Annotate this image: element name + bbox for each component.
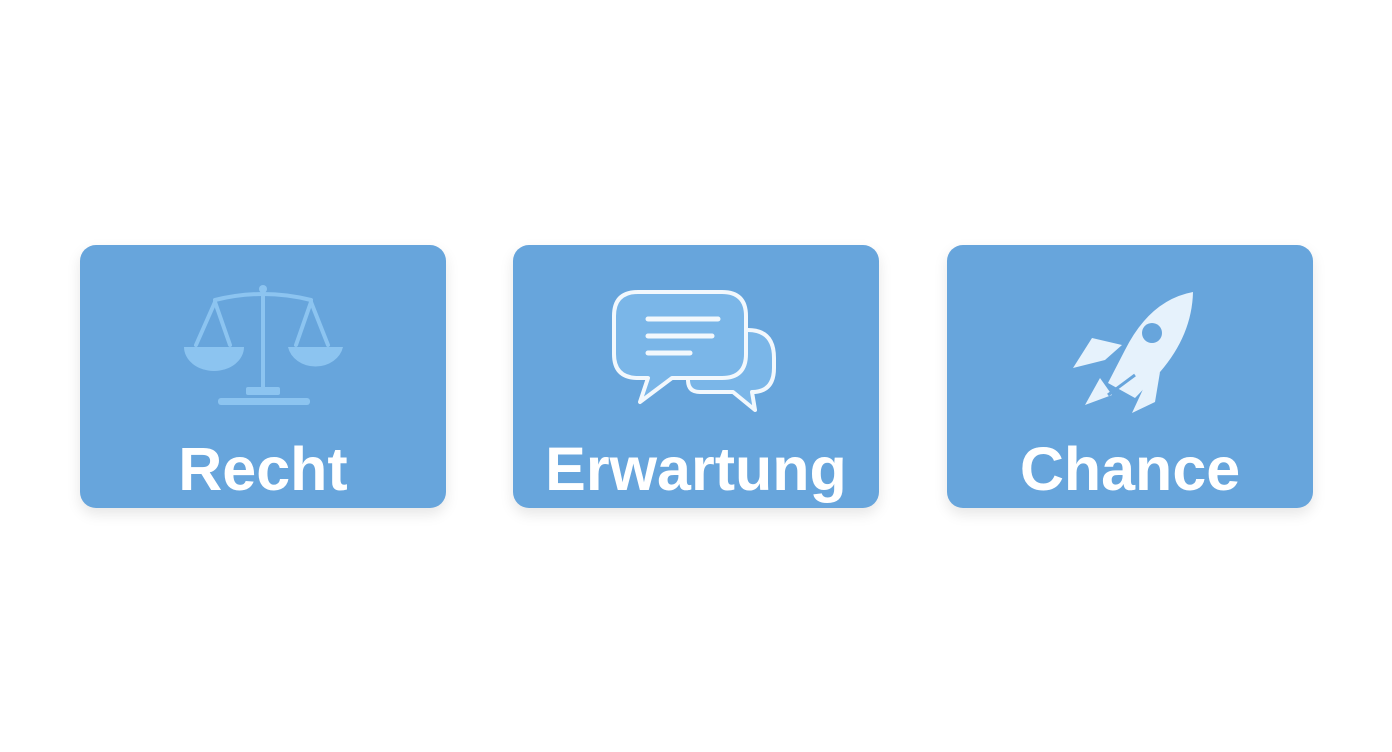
icon: scales <box>184 285 343 405</box>
icon: chat bubbles <box>612 290 776 412</box>
card: Erwartung <box>513 245 879 508</box>
card: Chance <box>947 245 1313 508</box>
label: Recht: Recht <box>178 435 348 503</box>
icon: rocket <box>1073 292 1193 413</box>
label: Erwartung: Erwartung <box>545 435 847 503</box>
label: Chance: Chance <box>1020 435 1240 503</box>
card: Recht <box>80 245 446 508</box>
